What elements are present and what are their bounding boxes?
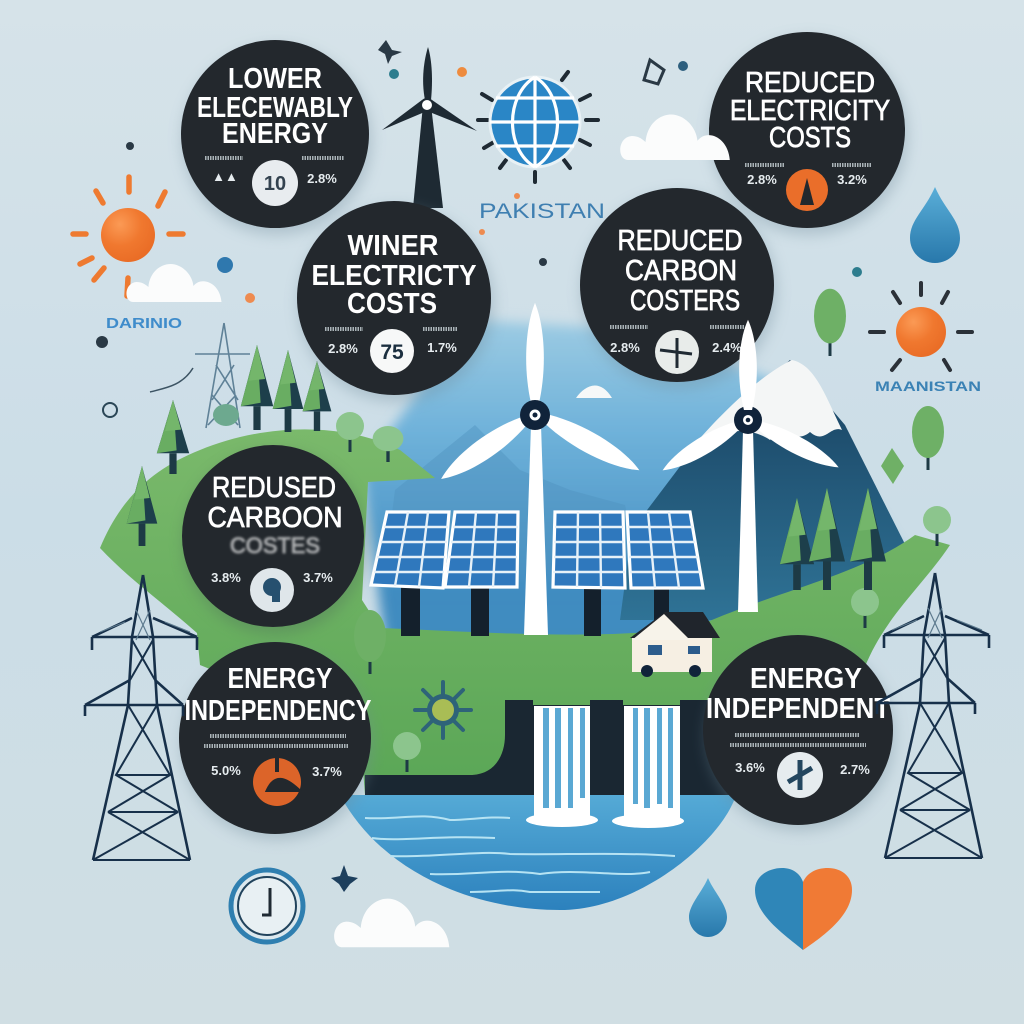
heading	[706, 663, 890, 725]
heading	[184, 663, 372, 727]
heading: ELECTRICITY	[730, 95, 890, 127]
label right: MAANISTAN	[875, 378, 981, 394]
small sun on land	[415, 682, 471, 738]
stats: 2.8%	[328, 341, 358, 356]
stats	[325, 329, 458, 373]
panel: reduced electricity costs	[709, 32, 908, 235]
stats	[730, 735, 870, 798]
stats: 5.0%	[211, 763, 241, 778]
clock	[231, 870, 303, 942]
panel: redused carboon costes	[182, 445, 367, 634]
waterfalls	[526, 706, 684, 828]
star icon	[331, 865, 358, 892]
stats: 2.7%	[840, 762, 870, 777]
left transmission pylon	[85, 575, 197, 860]
heading	[730, 67, 890, 154]
heading: ELECEWABLY	[197, 92, 353, 124]
decorative icons	[96, 40, 862, 417]
heading	[208, 472, 342, 558]
stats	[745, 165, 872, 211]
stats: 3.2%	[837, 172, 867, 187]
panel: lower renewable energy	[181, 40, 372, 235]
sun right	[870, 283, 972, 370]
snow peak small	[576, 385, 612, 398]
trees right side	[814, 289, 944, 484]
stats: 10	[264, 173, 286, 195]
cloud top	[620, 114, 730, 160]
stats: 2.4%	[712, 340, 742, 355]
small pylon	[195, 323, 250, 428]
bottom water drop	[689, 878, 727, 937]
panel: reduced carbon costers	[580, 188, 777, 389]
heading: CARBOON	[208, 502, 342, 534]
heading: COSTS	[347, 288, 437, 320]
stats: 2.8%	[307, 171, 337, 186]
dam	[365, 700, 736, 796]
heading: REDUCED	[745, 67, 875, 99]
cloud left	[126, 264, 222, 302]
heading	[197, 63, 353, 150]
heading: LOWER	[228, 63, 322, 95]
stats	[204, 736, 349, 806]
heading: ENERGY	[228, 663, 332, 695]
heading: REDUSED	[212, 472, 336, 504]
globe with Pakistan label	[478, 72, 605, 223]
right transmission pylon	[877, 573, 989, 858]
heading	[618, 225, 742, 317]
heading: CARBON	[625, 255, 737, 287]
heading: WINER	[348, 230, 439, 262]
label: Pakistan: PAKISTAN	[479, 200, 605, 223]
sun left	[73, 177, 183, 296]
lake	[340, 795, 736, 910]
panel: energy independent	[703, 635, 895, 831]
water drop right	[910, 187, 960, 263]
heading: ENERGY	[222, 118, 328, 150]
right turbine upper blade	[739, 320, 757, 410]
stats: 3.7%	[312, 764, 342, 779]
landscape	[100, 303, 951, 910]
stats: 2.8%	[747, 172, 777, 187]
heading: COSTS	[769, 122, 851, 154]
heading: ENERGY	[750, 663, 862, 695]
dark wind turbine	[382, 47, 477, 208]
heading: COSTES	[230, 533, 320, 558]
heading: INDEPENDENT	[706, 693, 890, 725]
stats	[205, 158, 344, 206]
wind turbine left	[435, 303, 644, 635]
heading: COSTERS	[630, 285, 740, 317]
stats: 3.8%	[211, 570, 241, 585]
right forest pines	[780, 488, 886, 590]
distant mountains	[385, 425, 640, 570]
wind turbine right	[658, 406, 843, 612]
house	[630, 612, 720, 677]
panel: winer electricity costs	[297, 201, 494, 402]
heading: REDUCED	[618, 225, 742, 257]
left forest pines	[127, 345, 331, 546]
green land	[100, 429, 950, 795]
panel: energy independency	[179, 642, 373, 840]
heading: ELECTRICTY	[312, 260, 476, 292]
stats: 1.7%	[427, 340, 457, 355]
heart	[755, 868, 852, 950]
stats	[610, 327, 745, 374]
big mountain	[620, 360, 918, 620]
heading: INDEPENDENCY	[184, 695, 372, 727]
round trees	[336, 412, 951, 772]
stats: 3.6%	[735, 760, 765, 775]
label left: DARINIO	[106, 315, 182, 332]
heading	[312, 230, 476, 320]
solar panels	[371, 512, 703, 636]
stats: ▲▲	[212, 169, 238, 184]
stats: 3.7%	[303, 570, 333, 585]
stats: 2.8%	[610, 340, 640, 355]
stats: 75	[380, 341, 404, 364]
stats	[211, 568, 333, 612]
cloud bottom	[334, 899, 449, 947]
sky	[362, 320, 905, 690]
